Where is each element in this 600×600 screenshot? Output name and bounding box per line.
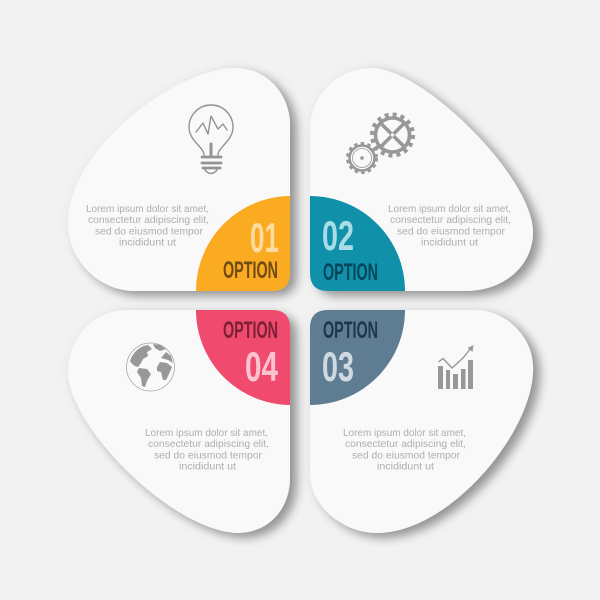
icon: gears: [348, 114, 413, 172]
number 03: 03: [322, 343, 354, 390]
description text: incididunt ut: [179, 460, 236, 472]
description text: Lorem ipsum dolor sit amet,: [86, 203, 209, 215]
description text: Lorem ipsum dolor sit amet,: [145, 427, 268, 439]
label OPTION: OPTION: [223, 317, 278, 344]
description text: consectetur adipiscing elit,: [345, 438, 466, 450]
description text: incididunt ut: [377, 460, 434, 472]
description text: consectetur adipiscing elit,: [148, 438, 269, 450]
icon: light bulb: [189, 105, 233, 174]
panel: option 01: [68, 68, 290, 291]
card shape: [68, 310, 290, 533]
description text: [388, 203, 511, 248]
panel: option 02: [310, 68, 533, 291]
number 02: 02: [322, 212, 354, 259]
label OPTION: OPTION: [223, 257, 278, 284]
teal quarter badge: [310, 196, 405, 291]
label OPTION: OPTION: [323, 317, 378, 344]
description text: incididunt ut: [421, 236, 478, 248]
description text: sed do eiusmod tempor: [95, 226, 203, 238]
description text: Lorem ipsum dolor sit amet,: [388, 203, 511, 215]
panel: option 03: [310, 310, 533, 533]
number 04: 04: [245, 343, 278, 390]
description text: sed do eiusmod tempor: [397, 226, 505, 238]
description text: Lorem ipsum dolor sit amet,: [343, 427, 466, 439]
pink quarter badge: [196, 310, 290, 405]
icon: bar chart with arrow: [438, 345, 474, 389]
label OPTION: OPTION: [323, 259, 378, 286]
description text: consectetur adipiscing elit,: [88, 214, 209, 226]
description text: [343, 427, 466, 472]
description text: sed do eiusmod tempor: [154, 450, 262, 462]
panel: option 04: [68, 310, 290, 533]
card shape: [310, 310, 533, 533]
icon: globe: [126, 343, 174, 391]
description text: [145, 427, 269, 472]
card shape: [310, 68, 533, 291]
number 01: 01: [250, 214, 279, 261]
card shape: [68, 68, 290, 291]
orange quarter badge: [196, 196, 290, 291]
description text: consectetur adipiscing elit,: [390, 214, 511, 226]
description text: incididunt ut: [119, 236, 176, 248]
description text: [86, 203, 209, 248]
description text: sed do eiusmod tempor: [352, 450, 460, 462]
slate quarter badge: [310, 310, 405, 405]
